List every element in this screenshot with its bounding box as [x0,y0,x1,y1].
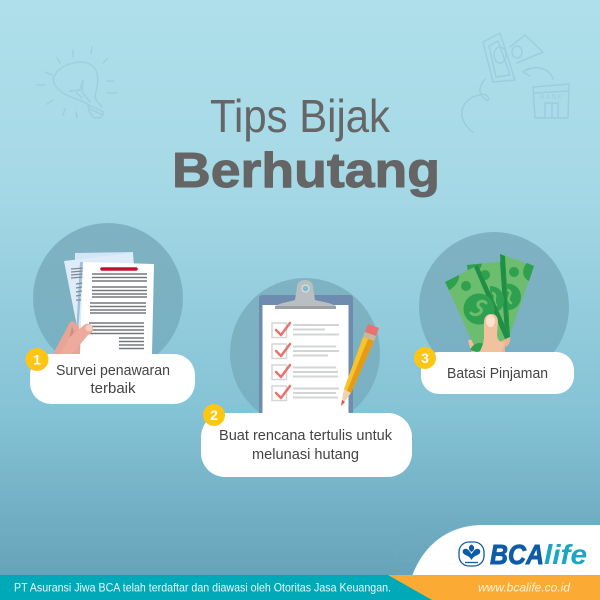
banknote left [445,265,510,352]
bubble text 1 line 2: terbaik [90,380,136,397]
title [172,90,440,198]
bubble text 3: Batasi Pinjaman [447,365,548,382]
icon: clipboard checklist [259,280,353,420]
number badge 2 [203,404,225,426]
logo wordmark BCA: BCA [490,539,544,570]
bubble text 2: Buat rencana tertulis untuk [219,427,392,444]
panel: batasi pinjaman [414,232,574,394]
title line 2: Berhutang [172,144,440,198]
number badge 1: 1 [33,352,41,368]
bubble text 2 line 2: melunasi hutang [252,446,359,463]
bubble text 1: Survei penawaran [56,362,170,379]
icon: ghost credit card [396,527,442,562]
icon: ghost money, bank and arrows [462,33,569,132]
text bubble 2 [201,413,412,477]
logo panel [412,525,600,576]
footer disclaimer: PT Asuransi Jiwa BCA telah terdaftar dan diawasi oleh Otoritas Jasa Keuangan. [14,580,391,594]
logo emblem [459,542,484,566]
logo wordmark life: life [544,539,587,570]
footer website: www.bcalife.co.id [478,580,570,594]
text bubble 3 [421,352,574,394]
icon: pencil [341,324,379,406]
number badge 3 [414,347,436,369]
icon: ghost light bulb [37,47,117,118]
icon: ghost money, bank and arrows: BANK [540,94,563,101]
logo: BCA life [459,539,587,570]
footer bar orange [388,575,600,600]
title line 1: Tips Bijak [210,90,391,142]
text bubble 1 [30,354,195,404]
banknote middle [467,261,509,337]
panel: survei penawaran [26,223,195,404]
backdrop circle 2 [230,278,380,428]
number badge 1 [26,348,48,371]
panel: rencana tertulis [201,278,412,477]
number badge 3: 3 [421,350,429,366]
number badge 2: 2 [210,407,218,423]
icon: hand holding documents [53,252,154,354]
icon: hand holding banknotes [445,254,534,356]
backdrop circle 3 [419,232,569,382]
backdrop circle 1 [33,223,183,373]
banknote right [500,254,534,337]
footer bar teal [0,575,440,600]
